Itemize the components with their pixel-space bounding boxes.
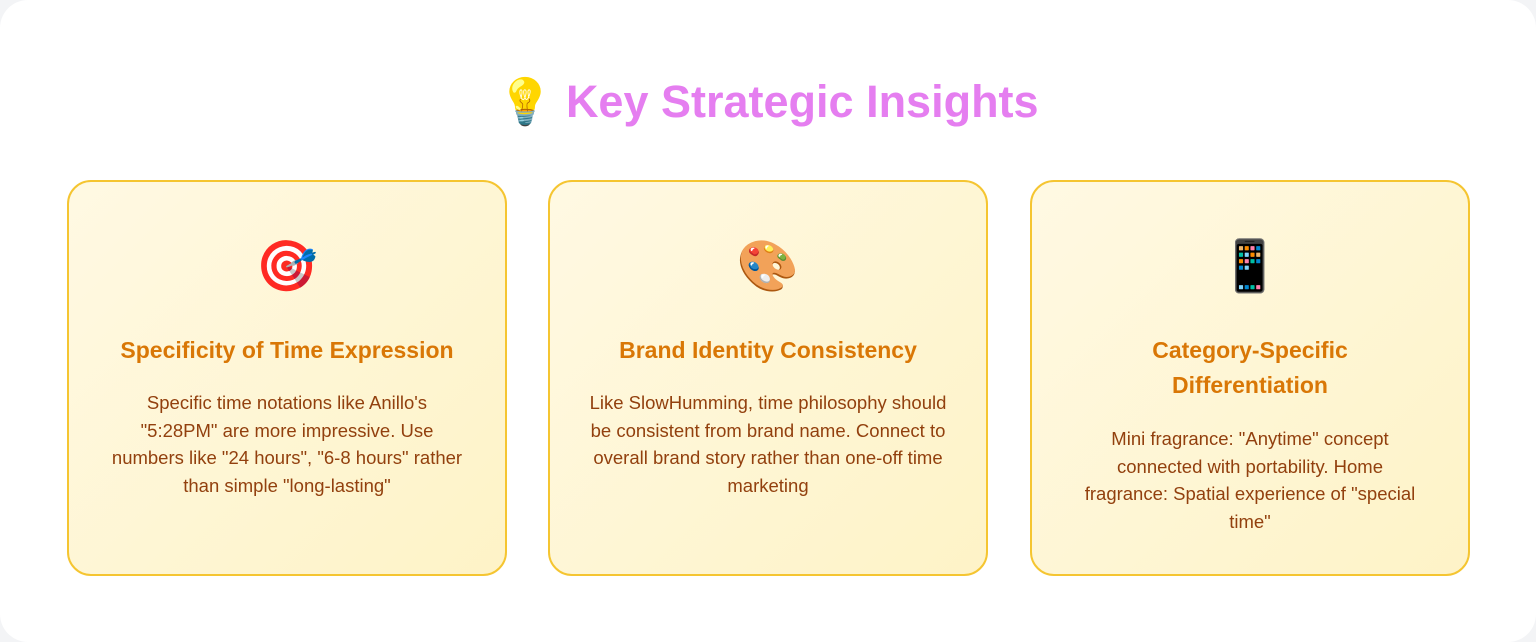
text xyxy=(112,392,462,496)
heading: Specificity of Time Expression xyxy=(120,337,454,363)
text: fragrance: Spatial experience of "special xyxy=(1085,483,1415,504)
heading xyxy=(1152,337,1348,398)
text xyxy=(1085,428,1415,532)
text: marketing xyxy=(727,474,809,496)
heading: Differentiation xyxy=(1172,372,1328,398)
panel: brand identity xyxy=(548,180,988,576)
text: time" xyxy=(1229,510,1271,532)
text: overall brand story rather than one-off time xyxy=(593,447,943,468)
text: connected with portability. Home xyxy=(1117,456,1383,476)
heading: Category-Specific xyxy=(1152,337,1348,363)
icon: phone: 📱 xyxy=(1219,238,1281,294)
heading: Brand Identity Consistency xyxy=(619,337,917,363)
text: be consistent from brand name. Connect to xyxy=(591,420,945,440)
text: numbers like "24 hours", "6-8 hours" rather xyxy=(112,447,462,468)
icon: target: 🎯 xyxy=(256,238,318,294)
text: Like SlowHumming, time philosophy should xyxy=(590,392,946,413)
text: than simple "long-lasting" xyxy=(183,474,391,496)
panel: category differentiation xyxy=(1030,180,1470,576)
text: Mini fragrance: "Anytime" concept xyxy=(1111,428,1389,449)
panel: time expression xyxy=(67,180,507,576)
title: 💡 Key Strategic Insights xyxy=(497,76,1039,127)
text: "5:28PM" are more impressive. Use xyxy=(141,420,433,440)
icon: palette: 🎨 xyxy=(737,238,799,294)
text xyxy=(590,392,946,496)
text: Specific time notations like Anillo's xyxy=(147,392,427,413)
